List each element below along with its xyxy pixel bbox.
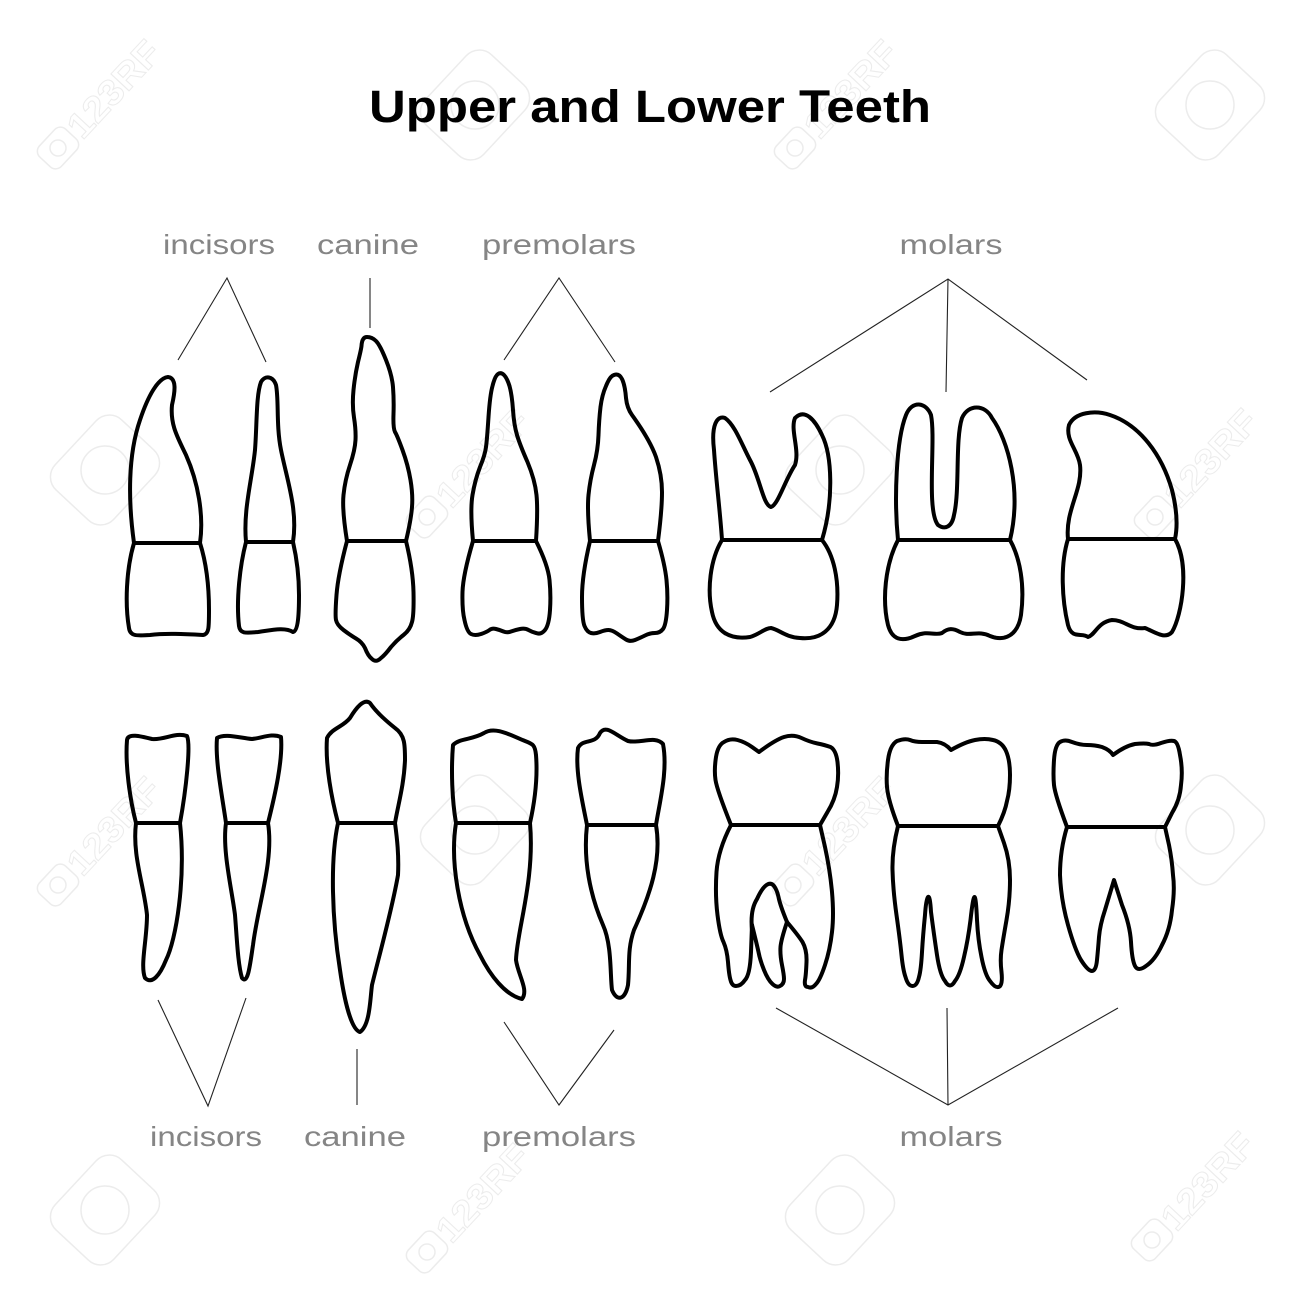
tooth: lower incisor 2: [217, 735, 281, 979]
tooth: upper canine: [336, 337, 414, 661]
tooth: upper incisor 2: [238, 377, 299, 633]
label: lower canine: canine: [304, 1121, 406, 1152]
tooth: lower premolar 1: [452, 730, 537, 999]
label: lower premolars: [482, 1022, 636, 1152]
tooth: upper premolar 2: [582, 374, 667, 641]
tooth: upper incisor 1: [127, 377, 209, 635]
label: lower incisors: [150, 998, 262, 1152]
title: Upper and Lower Teeth: [369, 81, 931, 132]
tooth: upper molar 3: [1063, 412, 1183, 637]
label: lower canine: [304, 1049, 406, 1152]
text: 123RF: [58, 32, 169, 146]
tooth: lower canine: [327, 702, 405, 1032]
tooth: upper molar 1: [710, 414, 837, 638]
tooth: lower incisor 1: [127, 735, 188, 980]
label: lower incisors: incisors: [150, 1121, 262, 1152]
text: 123RF: [427, 401, 538, 515]
text: 123RF: [1152, 1124, 1263, 1238]
label: upper premolars: premolars: [482, 229, 636, 260]
label: upper incisors: [163, 229, 275, 362]
text: 123RF: [795, 32, 906, 146]
label: upper incisors: incisors: [163, 229, 275, 260]
label: upper molars: [770, 229, 1087, 392]
tooth: lower molar 3: [1054, 740, 1182, 971]
tooth: upper premolar 1: [462, 373, 550, 635]
text: 123RF: [58, 769, 169, 883]
tooth: lower molar 1: [715, 736, 838, 988]
label: upper canine: [317, 229, 419, 328]
label: upper premolars: [482, 229, 636, 362]
text: 123RF: [1155, 401, 1266, 515]
label: lower molars: [776, 1008, 1118, 1152]
text: 123RF: [427, 1136, 538, 1250]
label: upper molars: molars: [900, 229, 1002, 260]
tooth: upper molar 2: [885, 404, 1022, 639]
label: lower premolars: premolars: [482, 1121, 636, 1152]
tooth: lower premolar 2: [577, 730, 665, 998]
label: upper canine: canine: [317, 229, 419, 260]
label: lower molars: molars: [900, 1121, 1002, 1152]
text: 123RF: [793, 769, 904, 883]
tooth: lower molar 2: [887, 739, 1010, 987]
